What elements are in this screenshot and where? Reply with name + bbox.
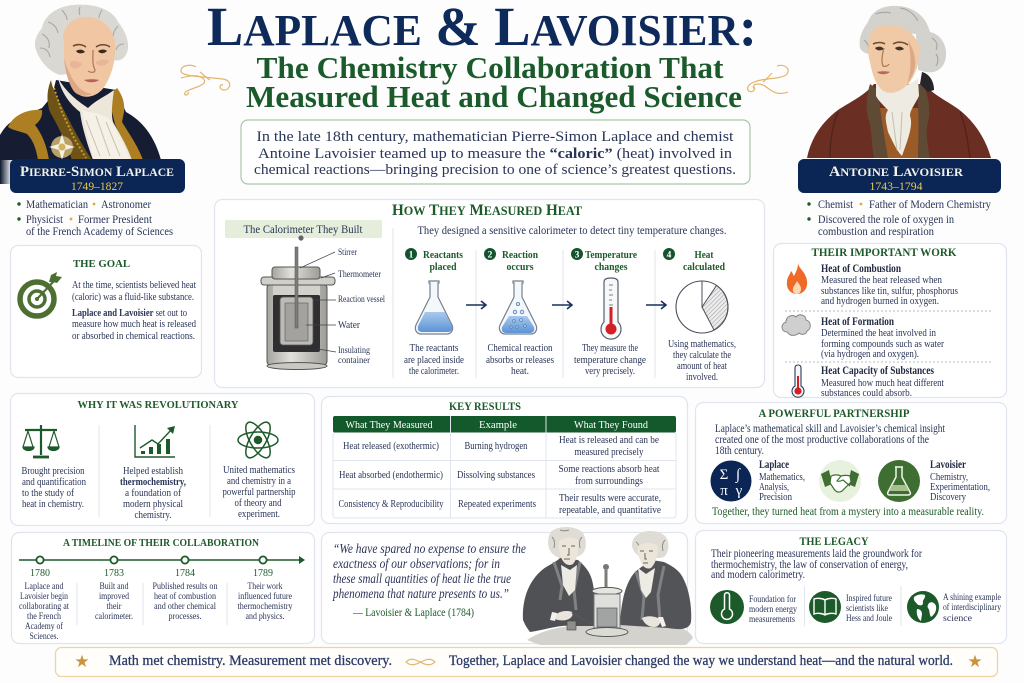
footer banner [56, 648, 998, 676]
step 1: The reactants [410, 343, 458, 354]
icon: math symbols: γ [735, 483, 743, 499]
panel: a powerful partnership: A POWERFUL PARTNERSHIP [758, 408, 910, 420]
Lavoisier roles list [807, 199, 991, 238]
calorimeter diagram [261, 235, 335, 370]
timeline axis [19, 556, 305, 564]
timeline 1784: 1784 [175, 567, 195, 579]
item: heat of formation: forming compounds such as water [821, 339, 944, 350]
results table: from surroundings [575, 476, 643, 487]
timeline 1784: heat of combustion [154, 591, 216, 602]
calorimeter label: The Calorimeter They Built [244, 224, 363, 236]
results table: Repeated experiments [458, 499, 536, 510]
text column 1 [22, 466, 87, 510]
partnership intro: Laplace’s mathematical skill and Lavoisier’s chemical insight [715, 423, 946, 435]
timeline 1780: Laplace and [24, 581, 64, 592]
Laplace strengths [759, 459, 805, 503]
legacy: book item: scientists like [846, 603, 888, 614]
item: heat of combustion: Heat of Combustion [821, 263, 902, 275]
timeline 1783: improved [99, 591, 129, 602]
text column 2: thermochemistry, [120, 477, 186, 488]
panel: key results: KEY RESULTS [449, 401, 521, 413]
Lavoisier roles list: Chemist [818, 199, 854, 211]
results table: Example [479, 420, 517, 431]
step 4: involved. [686, 372, 718, 383]
calorimeter labels: container [338, 355, 371, 366]
Lavoisier strengths [930, 459, 990, 503]
Lavoisier roles list: combustion and respiration [818, 226, 934, 238]
item: heat capacity: Measured how much heat different [821, 378, 944, 389]
text column 1: Brought precision [22, 466, 85, 477]
timeline 1783: calorimeter. [95, 611, 133, 622]
legacy: thermometer item: Foundation for [749, 594, 797, 605]
arrow [552, 301, 572, 309]
timeline 1780: Lavoisier begin [20, 591, 68, 602]
item: heat of combustion: substances like tin, sulfur, phosphorus [821, 286, 958, 297]
panel: quote [322, 532, 688, 644]
timeline 1780: the French [27, 611, 61, 622]
partnership intro: created one of the most productive collaborations of the [715, 434, 929, 446]
step 3 [571, 248, 646, 377]
item: heat of formation: (via hydrogen and oxygen). [821, 349, 919, 360]
footer banner: Together, Laplace and Lavoisier changed the way we understand heat—and the natural world. [449, 653, 953, 669]
icon: star: ★ [74, 652, 90, 671]
legacy: thermometer item: modern energy [749, 604, 797, 615]
panel: a powerful partnership: Together, they turned heat from a mystery into a measurable reality. [712, 506, 984, 518]
right figure [620, 531, 691, 629]
results table: Their results were accurate, [559, 493, 661, 504]
text column 1: to the study of [22, 488, 74, 499]
calorimeter labels [300, 247, 385, 366]
calorimeter labels: Thermometer [338, 269, 382, 280]
legacy intro: thermochemistry, the law of conservation of energy, [711, 559, 908, 571]
calorimeter labels: Insulating [338, 345, 370, 356]
legacy: book item [809, 591, 892, 624]
step 3: temperature change [574, 355, 646, 366]
panel: quote: phenomena that nature presents to us.” [332, 586, 509, 601]
step 2: heat. [511, 366, 529, 377]
panel: quote: — Lavoisier & Laplace (1784) [352, 607, 474, 619]
panel: their important work [774, 244, 1006, 399]
banner: Lavoisier name: 1743–1794 [870, 179, 922, 193]
timeline 1783: Built and [100, 581, 129, 592]
panel: key results [322, 396, 688, 524]
text column 2: a foundation of [125, 488, 181, 499]
timeline 1784: Published results on [152, 581, 218, 592]
step 4: they calculate the [673, 350, 731, 361]
timeline 1783: their [106, 601, 122, 612]
step 3: They measure the [582, 343, 638, 354]
panel: the goal: THE GOAL [73, 258, 130, 270]
step 1: are placed inside [404, 355, 464, 366]
icon: atom [238, 419, 278, 461]
banner: Laplace name [10, 159, 185, 193]
banner: Laplace name: 1749–1827 [71, 179, 123, 193]
legacy intro: Their pioneering measurements laid the groundwork for [711, 548, 922, 560]
panel: how they measured heat: They designed a sensitive calorimeter to detect tiny temperature changes. [418, 225, 727, 237]
panel: the legacy [696, 530, 1006, 644]
title: The Chemistry Collaboration That [256, 50, 724, 85]
step 4: amount of heat [677, 361, 727, 372]
panel: the goal: measure how much heat is released [72, 319, 197, 330]
timeline 1789: thermochemistry [238, 601, 293, 612]
item: heat of combustion: and hydrogen burned in oxygen. [821, 296, 939, 307]
icon: handshake [819, 460, 861, 502]
text column 3: experiment. [238, 509, 280, 520]
results table: repeatable, and quantitative [559, 505, 661, 516]
panel: a powerful partnership [696, 402, 1006, 524]
portrait: Lavoisier [807, 6, 991, 158]
results table: What They Found [574, 420, 649, 431]
results table: measured precisely [574, 447, 644, 458]
step 1: placed [430, 261, 456, 273]
text column 2: modern physical [123, 499, 183, 510]
icon: left flourish [181, 65, 230, 95]
apparatus [586, 564, 628, 636]
item: heat of combustion [821, 263, 958, 307]
step 4: Heat [694, 249, 714, 261]
arrow [466, 301, 486, 309]
footer banner: Math met chemistry. Measurement met discovery. [109, 653, 392, 669]
icon: thermometer [792, 365, 804, 397]
Laplace roles list: Physicist [26, 214, 64, 226]
panel: quote: exactness of our observations; for in [333, 556, 500, 571]
timeline 1789: Their work [248, 581, 283, 592]
timeline 1789 [238, 567, 293, 622]
step 3: 3 [575, 250, 580, 260]
text column 3: and chemistry in a [227, 476, 291, 487]
item: heat of formation: Heat of Formation [821, 316, 895, 328]
text column 2 [120, 466, 186, 521]
legacy: book item: Inspired future [846, 593, 892, 604]
panel: how they measured heat [214, 200, 764, 388]
illustration: Laplace and Lavoisier with calorimeter [523, 527, 693, 645]
icon: scales [23, 425, 59, 457]
text column 1: and quantification [22, 477, 87, 488]
calorimeter labels: Stirrer [338, 247, 358, 258]
results table: Consistency & Reproducibility [338, 499, 444, 510]
item: heat of combustion: Measured the heat released when [821, 275, 943, 286]
Laplace strengths: Mathematics, [759, 472, 805, 483]
portrait: Laplace [0, 5, 161, 184]
item: heat capacity: substances could absorb. [821, 388, 912, 399]
step 2 [484, 248, 554, 377]
Lavoisier strengths: Lavoisier [930, 459, 966, 471]
panel: the goal: Laplace and Lavoisier set out to [72, 308, 187, 319]
results table: Heat released (exothermic) [343, 441, 439, 452]
text column 3: powerful partnership [222, 487, 296, 498]
Laplace strengths: Analysis, [759, 482, 789, 493]
icon: growth chart [135, 425, 175, 457]
legacy: thermometer item: measurements [749, 614, 795, 625]
left figure [523, 527, 595, 632]
panel: the goal: or absorbed in chemical reactions. [72, 331, 195, 342]
timeline 1780: collaborating at [19, 601, 69, 612]
Lavoisier roles list: Discovered the role of oxygen in [818, 214, 954, 226]
panel: why it was revolutionary: WHY IT WAS REVOLUTIONARY [78, 399, 239, 411]
intro text box: In the late 18th century, mathematician Pierre-Simon Laplace and chemist [256, 129, 734, 145]
step 2: absorbs or releases [486, 355, 554, 366]
panel: quote: “We have spared no expense to ensure the [333, 541, 526, 556]
legacy: globe item [907, 591, 1001, 624]
Laplace roles list: Mathematician [26, 199, 88, 211]
timeline 1789: and physics. [246, 611, 284, 622]
results table: Heat is released and can be [559, 435, 659, 446]
step 3: changes [594, 261, 628, 273]
step 2: 2 [488, 250, 493, 260]
Lavoisier roles list: Father of Modern Chemistry [869, 199, 991, 211]
step 2: occurs [506, 261, 534, 273]
icon: math symbols: Σ [720, 467, 728, 483]
text column 3 [222, 465, 296, 520]
legacy intro: and modern calorimetry. [711, 569, 805, 581]
legacy intro [711, 548, 922, 581]
timeline 1789: influenced future [238, 591, 292, 602]
legacy: globe item: of interdisciplinary [943, 602, 1001, 613]
icon: math symbols [710, 460, 752, 502]
timeline 1784: and other chemical [154, 601, 216, 612]
icon: cloud [782, 315, 810, 335]
panel: how they measured heat: HOW THEY MEASURED HEAT [392, 202, 583, 219]
results table: Heat absorbed (endothermic) [339, 470, 443, 481]
Laplace strengths: Precision [759, 492, 793, 503]
item: heat capacity [821, 365, 944, 399]
results table: Dissolving substances [457, 470, 535, 481]
Lavoisier strengths: Chemistry, [930, 472, 968, 483]
step 1: Reactants [423, 249, 463, 261]
timeline 1780: Academy of [25, 621, 64, 632]
icon: knot ornament [406, 659, 435, 665]
timeline 1780: 1780 [30, 567, 50, 579]
intro text box: chemical reactions—bringing precision to one of science’s greatest questions. [254, 162, 736, 178]
icon: flask [878, 460, 920, 502]
timeline 1789: 1789 [253, 567, 273, 579]
intro text box: Antoine Lavoisier teamed up to measure the “caloric” (heat) involved in [258, 146, 733, 162]
step 3: very precisely. [585, 366, 635, 377]
legacy: globe item: A shining example [943, 592, 1001, 603]
item: heat capacity: Heat Capacity of Substances [821, 365, 935, 377]
timeline 1780 [19, 567, 69, 642]
Laplace roles list: of the French Academy of Sciences [26, 226, 173, 238]
partnership intro: 18th century. [715, 445, 764, 457]
legacy: book item: Hess and Joule [846, 613, 892, 624]
icon: math symbols: ∫ [735, 467, 742, 483]
icon: math symbols: π [720, 483, 728, 499]
panel: timeline: A TIMELINE OF THEIR COLLABORATION [63, 537, 259, 549]
step 1: the calorimeter. [409, 366, 459, 377]
icon: flame [787, 263, 807, 294]
results table: Burning hydrogen [464, 441, 528, 452]
step 1 [404, 248, 464, 377]
Laplace strengths: Laplace [759, 459, 789, 471]
panel: the legacy: THE LEGACY [800, 536, 869, 548]
arrow [646, 301, 666, 309]
panel: why it was revolutionary [10, 394, 314, 526]
calorimeter labels: Water [338, 320, 360, 331]
text column 1: heat in chemistry. [22, 499, 84, 510]
step 3: Temperature [585, 249, 637, 261]
step 4: calculated [683, 261, 725, 273]
text column 2: chemistry. [134, 510, 172, 521]
legacy: globe item: science [943, 613, 972, 624]
step 4: Using mathematics, [668, 339, 736, 350]
intro text box [241, 120, 750, 184]
banner: Lavoisier name [798, 159, 1001, 193]
step 2: Chemical reaction [488, 343, 553, 354]
calorimeter labels: Reaction vessel [338, 294, 385, 305]
calorimeter label [225, 220, 382, 238]
icon: target with arrow [20, 272, 62, 316]
banner: Laplace name: PIERRE-SIMON LAPLACE [20, 164, 174, 180]
step 4 [663, 248, 736, 383]
results table: Some reactions absorb heat [558, 464, 660, 475]
partnership intro [715, 423, 946, 457]
timeline 1780: Sciences. [30, 631, 58, 642]
panel: the goal: (caloric) was a fluid-like substance. [72, 292, 194, 303]
icon: star: ★ [967, 652, 983, 671]
panel: their important work: THEIR IMPORTANT WORK [812, 247, 957, 259]
panel: quote: these small quantities of heat lie the true [333, 571, 511, 586]
Lavoisier strengths: Experimentation, [930, 482, 990, 493]
results table: What They Measured [346, 420, 433, 431]
text column 3: United mathematics [223, 465, 295, 476]
title: Measured Heat and Changed Science [246, 79, 742, 114]
icon: right flourish [748, 65, 788, 93]
text column 3: of theory and [234, 498, 282, 509]
timeline 1784 [152, 567, 218, 622]
panel: the goal: At the time, scientists believed heat [72, 280, 196, 291]
banner: Lavoisier name: ANTOINE LAVOISIER [829, 164, 964, 180]
Laplace roles list [17, 199, 173, 238]
timeline 1783: 1783 [104, 567, 124, 579]
text column 2: Helped establish [123, 466, 184, 477]
title [207, 0, 757, 114]
Laplace roles list: Former President [78, 214, 153, 226]
timeline 1783 [95, 567, 133, 622]
results table [333, 416, 676, 518]
item: heat of formation: Determined the heat involved in [821, 328, 937, 339]
item: heat of formation [821, 316, 944, 360]
Lavoisier strengths: Discovery [930, 492, 967, 503]
panel: the goal [10, 246, 202, 378]
timeline 1784: processes. [168, 611, 202, 622]
step 4: 4 [667, 250, 672, 260]
step 1: 1 [409, 250, 414, 260]
legacy: thermometer item [710, 590, 797, 625]
panel: timeline [12, 532, 314, 644]
step 2: Reaction [502, 249, 538, 261]
Laplace roles list: Astronomer [101, 199, 151, 211]
